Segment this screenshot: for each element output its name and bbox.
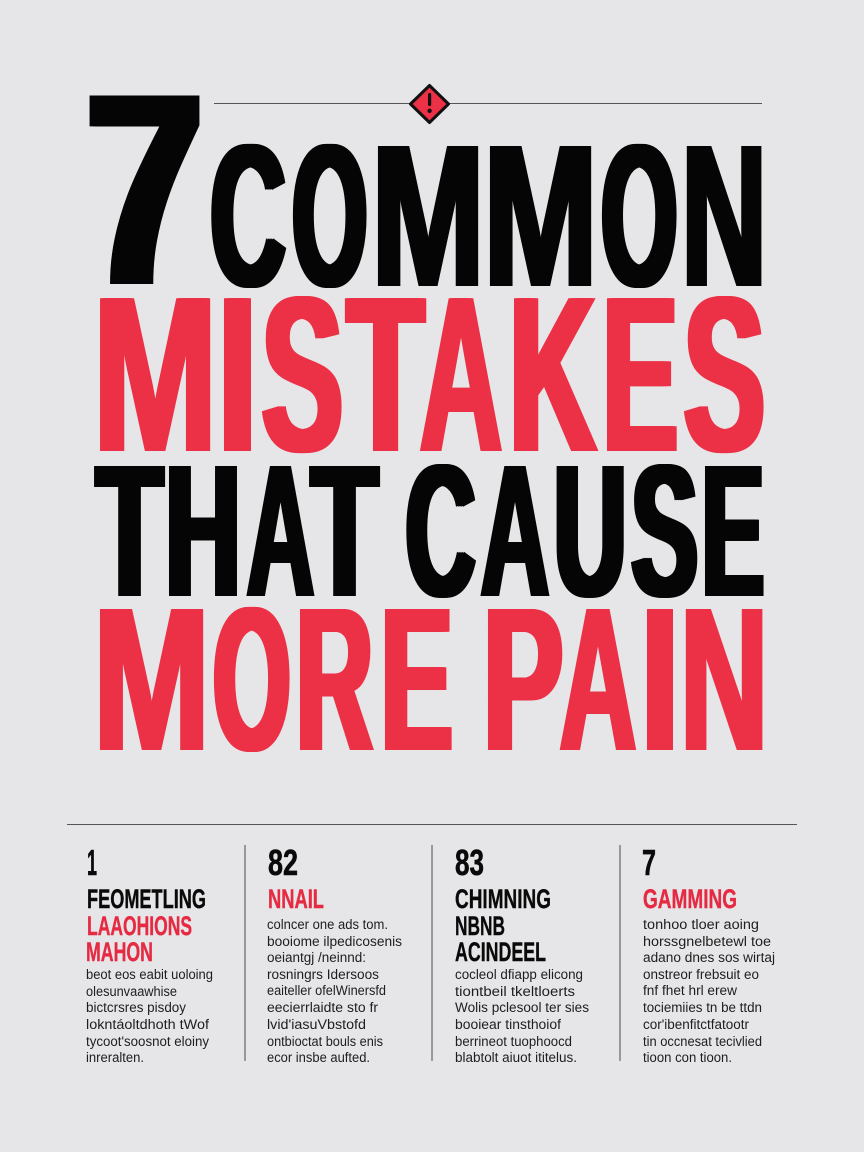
body text: cocleol dfiapp elicong [455, 967, 583, 982]
title [88, 37, 768, 794]
title line: MORE PAIN: R [296, 565, 373, 794]
body text: eaiteller ofelWinersfd [267, 983, 386, 998]
body text: tin occnesat tecivlied [643, 1034, 762, 1049]
title line: THAT CAUSE: C [406, 426, 475, 637]
heading: NBNB [455, 911, 505, 941]
title line: THAT CAUSE: U [554, 426, 626, 637]
title line: COMMON: N [681, 103, 767, 330]
heading [86, 884, 206, 967]
body text: booiome ilpedicosenis [267, 934, 402, 949]
body text: onstreor frebsuit eo [643, 967, 759, 982]
body text: blabtolt aiuot ititelus. [455, 1050, 577, 1065]
title line: THAT CAUSE: E [702, 426, 764, 637]
body text: cor'ibenfitctfatootr [643, 1017, 749, 1032]
body text: tiontbeil tkeltloerts [455, 984, 575, 999]
body text: olesunvaawhise [86, 984, 177, 999]
panel: column 1 [86, 842, 213, 1065]
title line: MORE PAIN: P [484, 565, 563, 794]
title line: COMMON: O [601, 103, 677, 330]
heading: ACINDEEL [455, 937, 546, 967]
title line: THAT CAUSE: S [632, 426, 698, 637]
title line: MISTAKES: T [347, 251, 424, 499]
body text: eecierrlaidte sto fr [267, 1000, 379, 1015]
body text: adano dnes sos wirtaj [643, 950, 775, 965]
title line: MORE PAIN: I [642, 565, 678, 794]
title line: MORE PAIN [93, 565, 768, 794]
body text: tonhoo tloer aoing [643, 917, 759, 932]
number: 7 [642, 842, 656, 883]
heading: LAAOHIONS [87, 911, 192, 941]
body text: fnf fhet hrl erew [643, 983, 737, 998]
title line: MORE PAIN: N [680, 565, 768, 794]
title line: MISTAKES: A [420, 251, 503, 499]
title line: MISTAKES: M [92, 251, 218, 499]
body text: inreralten. [86, 1050, 144, 1065]
heading: FEOMETLING [87, 884, 206, 914]
panel: column 1: 1 [87, 842, 97, 883]
body text: berrineot tuophoocd [455, 1034, 572, 1049]
body text: tioon con tioon. [643, 1050, 732, 1065]
heading: NNAIL [268, 884, 324, 914]
heading [455, 884, 551, 967]
body text [267, 917, 402, 1065]
title line: THAT CAUSE: A [246, 426, 315, 637]
body text: beot eos eabit uoloing [86, 967, 213, 982]
body text: tociemiies tn be ttdn [643, 1000, 762, 1015]
body text: rosningrs Idersoos [267, 967, 379, 982]
body text: lvid'iasuVbstofd [267, 1017, 366, 1032]
number: 83 [455, 842, 484, 883]
body text: booiear tinsthoiof [455, 1017, 561, 1032]
heading: CHIMNING [455, 884, 551, 914]
panel: column 2 [267, 842, 402, 1065]
body text: ecor insbe aufted. [267, 1050, 370, 1065]
title numeral 7: 7 [88, 37, 201, 343]
title line: THAT CAUSE: H [166, 426, 240, 637]
title line: MISTAKES: S [684, 251, 765, 499]
title line: MORE PAIN: M [93, 565, 210, 794]
title line: MISTAKES: S [262, 251, 343, 499]
title line: MORE PAIN: A [560, 565, 637, 794]
title line: COMMON: C [211, 103, 286, 330]
panel: column 3 [455, 842, 589, 1065]
number: 82 [268, 842, 298, 883]
title line: COMMON: M [483, 103, 598, 330]
title line: COMMON: M [371, 103, 485, 330]
title line: COMMON: O [292, 103, 367, 330]
title line: MISTAKES: I [218, 251, 257, 499]
heading: MAHON [86, 937, 153, 967]
body text: bictcrsres pisdoy [86, 1000, 186, 1015]
title line: MISTAKES: E [603, 251, 678, 499]
heading: GAMMING [643, 884, 737, 914]
body text: oeiantgj /neinnd: [267, 950, 366, 965]
title line: COMMON [211, 103, 767, 330]
body text: ontbioctat bouls enis [267, 1034, 383, 1049]
icon: warning diamond [410, 86, 448, 122]
title line: THAT CAUSE [94, 426, 764, 637]
body text [86, 967, 213, 1065]
title line: THAT CAUSE: T [96, 426, 163, 637]
title line: THAT CAUSE: T [311, 426, 378, 637]
title line: THAT CAUSE: A [480, 426, 550, 637]
body text: horssgnelbetewl toe [643, 934, 771, 949]
title line: MISTAKES [92, 251, 765, 499]
title line: MORE PAIN: O [213, 565, 290, 794]
body text: colncer one ads tom. [267, 917, 388, 932]
body text: tycoot'soosnot eloiny [86, 1034, 209, 1049]
panel: column 4 [642, 842, 775, 1065]
title line: MORE PAIN: E [381, 565, 452, 794]
body text: lokntáoltdhoth tWof [86, 1017, 209, 1032]
body text: Wolis pclesool ter sies [455, 1000, 589, 1015]
body text [455, 967, 589, 1065]
body text [643, 917, 775, 1065]
title line: MISTAKES: K [509, 251, 596, 499]
